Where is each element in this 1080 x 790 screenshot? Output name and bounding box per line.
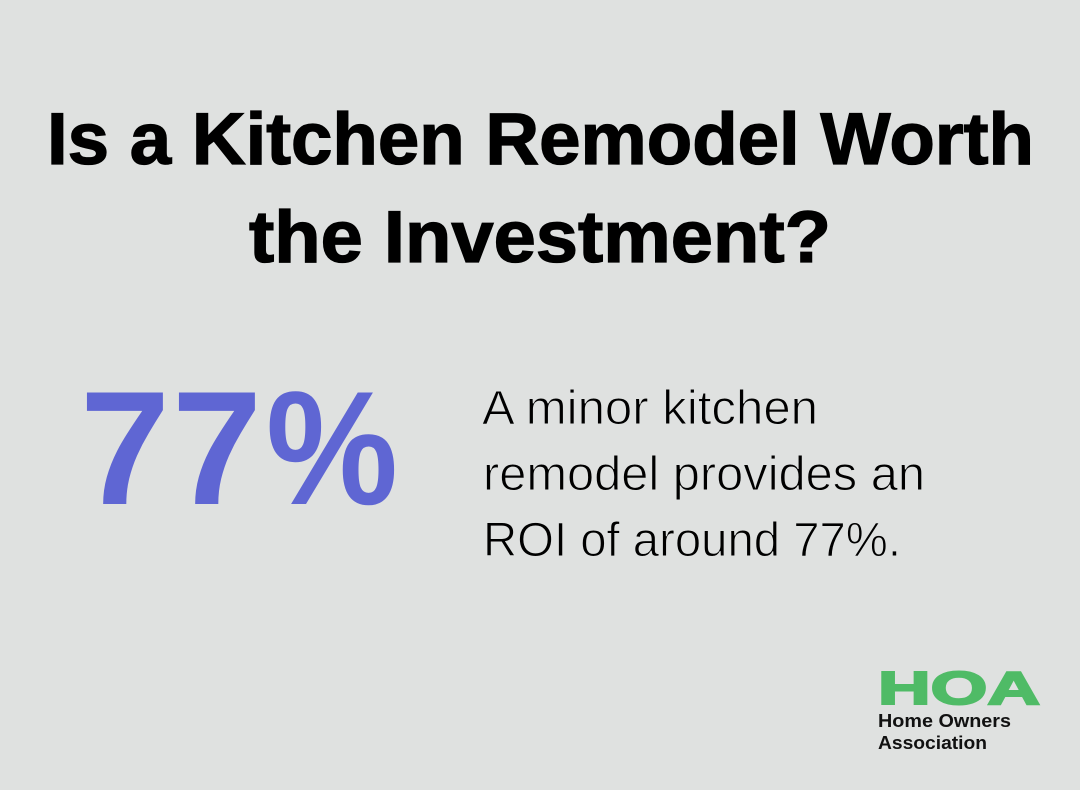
logo: Home Owners Association [878,662,1040,753]
big statistic: 77%: % [266,358,398,539]
description text: ROI of around 77%. [483,514,901,567]
description text [482,382,925,567]
logo: Home Owners Association: Association [878,732,987,753]
big statistic: 77%: 7 [172,358,262,539]
description text: remodel provides an [483,448,925,501]
title [47,99,1034,278]
title: the Investment? [249,197,831,278]
title: Is a Kitchen Remodel Worth [47,99,1034,180]
logo: Home Owners Association: Home Owners [878,710,1011,731]
description text: A minor kitchen [482,382,818,435]
big statistic: 77%: 7 [80,358,170,539]
logo: Home Owners Association: HOA [878,662,1040,714]
big statistic: 77% [80,358,398,539]
